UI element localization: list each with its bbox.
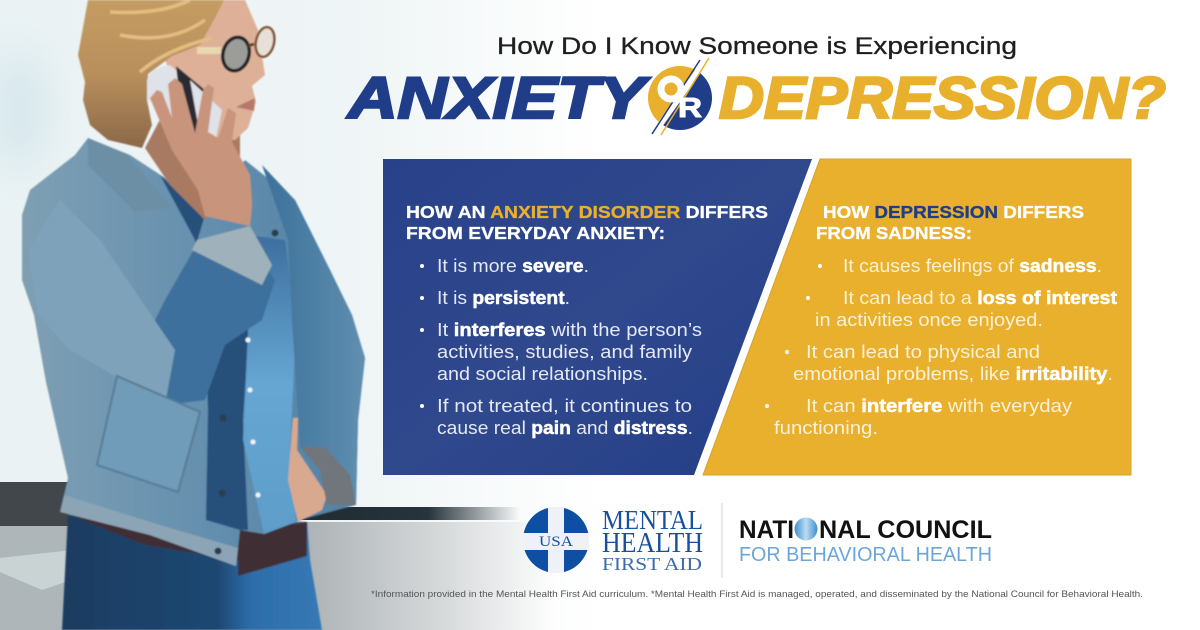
- jacket buttons: [246, 338, 260, 498]
- face: [165, 0, 265, 140]
- heading: HOW AN ANXIETY DISORDER DIFFERS: [406, 202, 768, 222]
- title line: How Do I Know Someone is Experiencing: [497, 33, 1017, 60]
- jacket right front: [243, 235, 296, 534]
- bullet text: loss of interest: It can lead to a loss of interest: [843, 288, 1117, 308]
- footnote: *Information provided in the Mental Health First Aid curriculum. *Mental Health First Aid is managed, operated, and disseminated by the National Council for Behavioral Health.: [371, 589, 1143, 600]
- belt: [70, 500, 307, 576]
- logo: National Council: NAL COUNCIL: [819, 516, 992, 544]
- jacket rivets: [214, 230, 278, 554]
- bullet text: interferes: It interferes with the person’s: [437, 320, 702, 340]
- wordmark: FIRST AID: [602, 554, 702, 574]
- logo divider: [722, 503, 723, 578]
- pocket: [97, 376, 200, 492]
- bullet text: sadness: It causes feelings of sadness .: [843, 256, 1102, 276]
- wordmark: HEALTH: [602, 527, 703, 559]
- heading: HOW DEPRESSION DIFFERS: [823, 202, 1084, 222]
- hand: [150, 78, 252, 226]
- bullet text: relationships: and social relationships.: [437, 364, 648, 384]
- hip hand: [288, 418, 327, 522]
- logo: Mental Health First Aid: [523, 505, 703, 574]
- jeans: [62, 515, 322, 630]
- phone: [147, 65, 222, 138]
- bullets: [765, 264, 822, 408]
- wordmark: MENTAL: [602, 505, 703, 535]
- icon: cross badge: USA: [539, 534, 573, 550]
- bullet text: activities once enjoyed: in activities once enjoyed.: [815, 310, 1043, 330]
- bullet text: functioning: functioning.: [774, 418, 878, 438]
- bullets: [420, 264, 424, 408]
- gray cuff: [192, 226, 272, 285]
- heading line two: FROM SADNESS:: [816, 223, 972, 243]
- logo: National Council: [739, 516, 992, 566]
- photo: woman on the phone: [22, 0, 365, 630]
- bullet text: irritability: emotional problems, like irritability .: [793, 364, 1113, 384]
- upper arm: [28, 200, 175, 405]
- bullet text: pain and distress: cause real pain and distress .: [437, 418, 693, 438]
- bullet text: interfere: It can interfere with everyday: [806, 396, 1072, 416]
- logo: National Council: FOR BEHAVIORAL HEALTH: [739, 544, 992, 566]
- panel: anxiety disorder: [383, 159, 812, 475]
- icon: cross badge: [523, 507, 589, 573]
- heading line two: FROM EVERYDAY ANXIETY:: [406, 223, 665, 243]
- jacket: [22, 138, 365, 566]
- bullet text: activities: activities, studies, and family: [437, 342, 692, 362]
- shirt placket: [160, 175, 250, 530]
- mouth: [236, 98, 255, 111]
- hair: [78, 0, 224, 148]
- logo: National Council: NATI: [739, 516, 794, 544]
- bullet text: if not treated: If not treated, it continues to: [437, 396, 692, 416]
- OR badge: R: [678, 92, 702, 123]
- glasses: [197, 25, 277, 74]
- right sleeve: [262, 165, 365, 505]
- gray hip cuff: [300, 447, 356, 505]
- neck: [145, 110, 240, 220]
- wordmark: [602, 505, 703, 574]
- title word: anxiety: ANXIETY: [346, 66, 651, 131]
- OR badge: [648, 58, 712, 136]
- hair highlights: [110, 0, 212, 72]
- bullet text: severe: It is more severe.: [437, 256, 589, 276]
- bullet text: physical: It can lead to physical and: [806, 342, 1040, 362]
- title word: depression: DEPRESSION?: [719, 66, 1166, 131]
- jacket hem: [60, 495, 238, 566]
- panel: depression: [703, 159, 1131, 475]
- icon: globe: [794, 518, 818, 540]
- bullet text: persistent: It is persistent .: [437, 288, 570, 308]
- collar: [88, 138, 172, 212]
- phone edge: [176, 66, 205, 137]
- raised forearm: [130, 246, 275, 405]
